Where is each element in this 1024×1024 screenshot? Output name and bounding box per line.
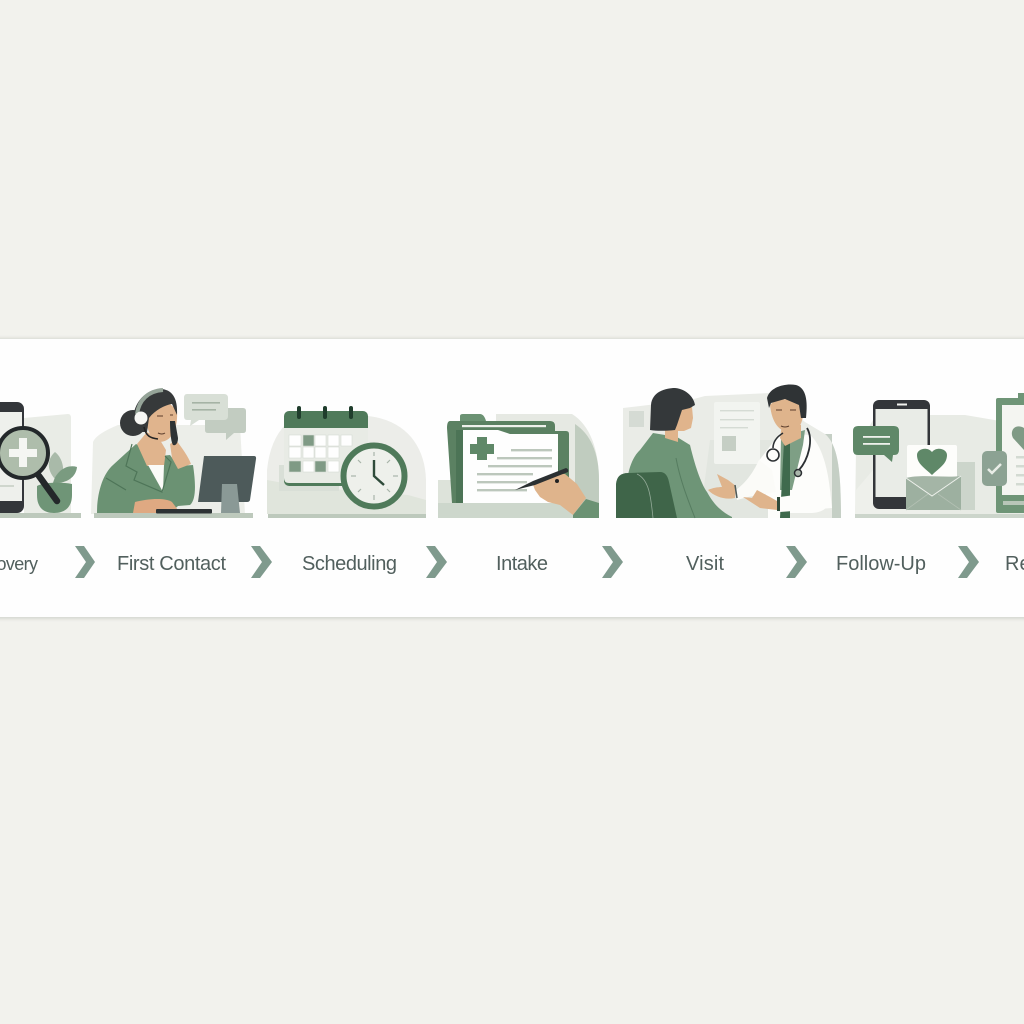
arrow 6 bbox=[958, 546, 979, 578]
arrow 5 bbox=[786, 546, 807, 578]
scene: discovery bbox=[0, 402, 81, 518]
scene: first contact bbox=[91, 389, 256, 518]
back card bbox=[950, 462, 975, 510]
speech bubbles bbox=[184, 394, 246, 440]
label: first contact: First Contact bbox=[117, 553, 226, 575]
arrow 3 bbox=[426, 546, 447, 578]
icon: medical folder bbox=[447, 414, 569, 503]
icon: phone bbox=[873, 400, 930, 509]
icon: clock bbox=[344, 446, 404, 506]
label: visit: Visit bbox=[686, 553, 724, 575]
icon: clipboard bbox=[982, 393, 1024, 513]
icon: potted plant bbox=[37, 452, 77, 513]
doctor bbox=[736, 385, 830, 518]
label: scheduling: Scheduling bbox=[302, 553, 397, 575]
arrow 4 bbox=[602, 546, 623, 578]
icon: calendar bbox=[279, 406, 368, 491]
arrow 1 bbox=[75, 546, 95, 578]
scene: follow-up bbox=[853, 393, 1024, 518]
icon: message bubble bbox=[853, 426, 899, 462]
label: follow-up: Follow-Up bbox=[836, 553, 926, 575]
scene: visit bbox=[616, 385, 841, 518]
patient bbox=[625, 388, 732, 518]
chair bbox=[616, 472, 677, 518]
panel: journey band bbox=[0, 339, 1024, 617]
scene: scheduling bbox=[267, 406, 426, 518]
panel shadow bbox=[0, 338, 1024, 619]
icon: envelope with heart bbox=[906, 445, 961, 510]
icon: magnifier bbox=[0, 428, 57, 501]
hand with pen bbox=[515, 468, 599, 518]
icon: computer monitor bbox=[198, 456, 256, 513]
arrow 2 bbox=[251, 546, 272, 578]
hands bbox=[708, 474, 832, 512]
agent bbox=[97, 389, 212, 514]
icon: phone bbox=[0, 402, 24, 513]
scene: intake bbox=[438, 414, 599, 518]
label: intake: Intake bbox=[496, 553, 548, 575]
